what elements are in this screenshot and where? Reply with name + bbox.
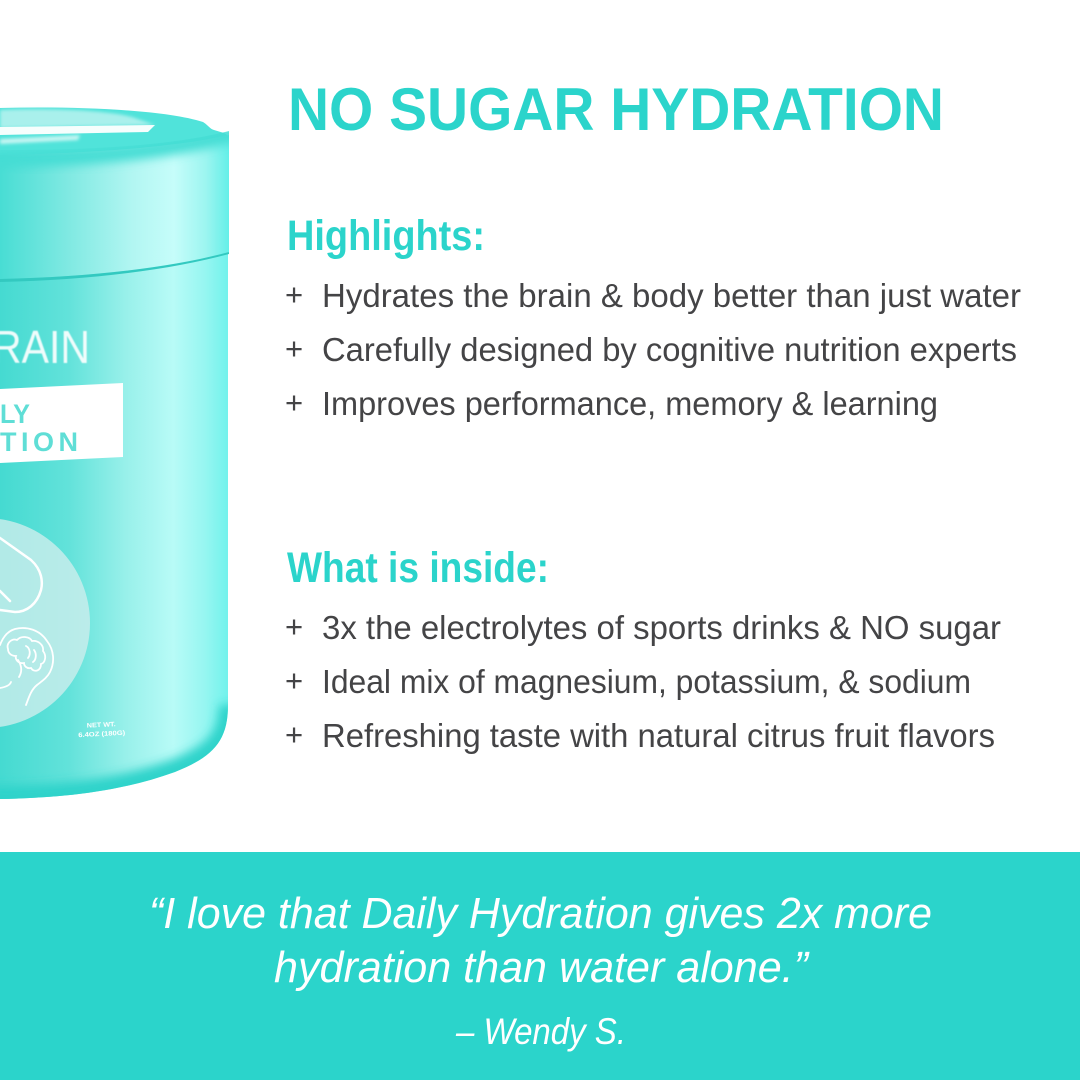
lid label	[0, 109, 155, 128]
net weight text	[78, 721, 125, 739]
inside item 1: 3x the electrolytes of sports drinks & NO sugar	[322, 609, 1001, 646]
panel: highlights	[285, 212, 1021, 422]
quote line 2: hydration than water alone.”	[274, 943, 810, 992]
heading: highlights: Highlights:	[287, 212, 485, 260]
jar base shading	[0, 705, 230, 797]
highlight item 2: Carefully designed by cognitive nutrition experts	[322, 331, 1017, 368]
quote attribution: – Wendy S.	[455, 1011, 626, 1052]
product jar	[0, 108, 240, 799]
highlight item 2: +	[285, 331, 303, 366]
highlight item 1: +	[285, 277, 303, 312]
net weight text: NET WT.	[87, 721, 116, 730]
icon: head with brain	[0, 628, 53, 705]
lid rim shading	[0, 132, 240, 160]
heading: what is inside: What is inside:	[287, 544, 549, 592]
highlight item 3: Improves performance, memory & learning	[322, 385, 938, 422]
inside item 3: +	[285, 717, 303, 752]
banner background	[0, 852, 1080, 1080]
net weight text: 6.4OZ (180G)	[78, 730, 125, 739]
title: NO SUGAR HYDRATION	[288, 76, 944, 143]
inside item 3: Refreshing taste with natural citrus fruit flavors	[322, 717, 995, 754]
product label text line 2: TION	[0, 427, 78, 457]
inside item 2: Ideal mix of magnesium, potassium, & sodium	[322, 663, 971, 700]
panel: testimonial banner	[0, 852, 1080, 1080]
icon circle	[0, 518, 90, 728]
jar lid side	[0, 135, 229, 279]
lid label small text	[0, 135, 80, 144]
inside item 2: +	[285, 663, 303, 698]
product label text line 1: LY	[0, 399, 30, 429]
highlight item 3: +	[285, 385, 303, 420]
panel: what is inside	[285, 544, 1001, 754]
icon: water drop	[0, 538, 42, 612]
jar body	[0, 248, 228, 799]
highlight item 1: Hydrates the brain & body better than just water	[322, 277, 1021, 314]
jar lid top	[0, 108, 229, 170]
lid label strip	[0, 125, 155, 135]
lid shadow line	[0, 252, 229, 282]
inside item 1: +	[285, 609, 303, 644]
white product label	[0, 383, 123, 463]
quote line 1: “I love that Daily Hydration gives 2x more	[149, 889, 932, 938]
